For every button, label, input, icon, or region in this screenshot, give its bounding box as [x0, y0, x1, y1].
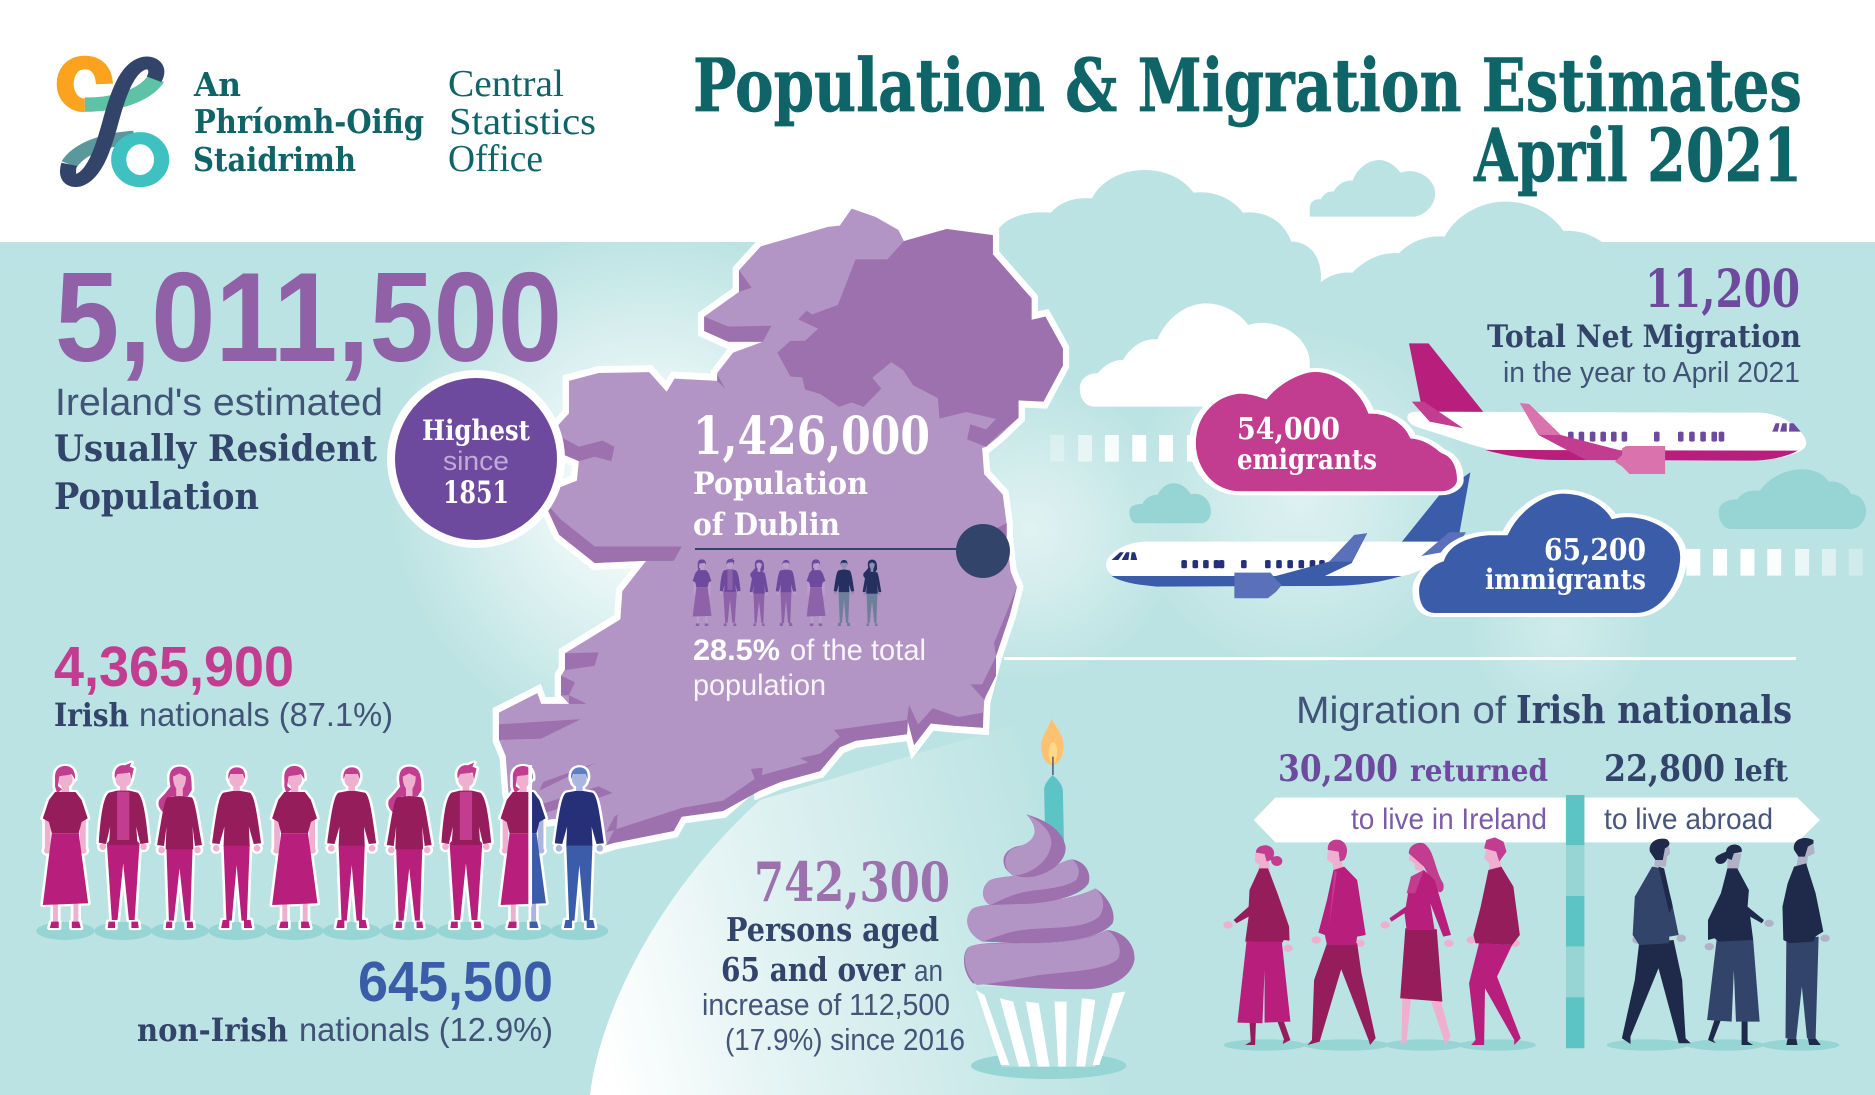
emigrants text — [1237, 412, 1377, 476]
headline number: 5,011,500 — [55, 246, 562, 388]
logo text: Irish name: Staidrimh — [193, 140, 356, 179]
non-Irish nationals stat: nationals (12.9%) — [299, 1011, 553, 1048]
returned figure — [1278, 748, 1548, 790]
over-65s stat: (17.9%) since 2016 — [725, 1022, 965, 1057]
net migration stat: in the year to April 2021 — [1503, 357, 1800, 389]
badge: highest since 1851 — [391, 374, 561, 544]
net migration stat: 11,200 — [1645, 259, 1800, 320]
plane: immigrants — [1106, 472, 1470, 598]
Dublin share text — [693, 634, 926, 702]
over-65s stat: 742,300 — [754, 850, 950, 914]
logo text: Irish name: An — [193, 65, 241, 104]
heading: migration of Irish nationals: Migration of — [1296, 690, 1506, 732]
over-65s stat: increase of 112,500 — [702, 987, 950, 1022]
net migration stat: Total Net Migration — [1487, 319, 1801, 355]
divider — [1004, 657, 1796, 660]
left figure: 22,800 — [1604, 748, 1725, 790]
non-Irish nationals stat — [137, 950, 553, 1049]
immigrants text: immigrants — [1485, 563, 1646, 596]
Dublin share text: 28.5% — [693, 634, 780, 667]
people returning — [1223, 837, 1536, 1051]
logo icon — [65, 62, 162, 181]
background glows — [390, 230, 1650, 750]
immigrants text — [1485, 533, 1646, 596]
immigrants text: 65,200 — [1544, 533, 1646, 568]
signpost labels — [1351, 803, 1773, 836]
cloud: emigrants — [1193, 370, 1460, 493]
logo text: Irish name: Phríomh-Oifig — [194, 102, 424, 141]
Dublin share text: of the total — [790, 634, 926, 667]
signpost labels: to live in Ireland — [1351, 803, 1547, 836]
Dublin text — [693, 406, 930, 543]
signpost with arrows — [1254, 795, 1820, 1048]
headline label: Ireland's estimated — [55, 382, 383, 424]
logo text: English name: Office — [448, 138, 543, 180]
Irish nationals stat: Irish — [54, 696, 129, 734]
badge: highest since 1851: 1851 — [443, 475, 509, 511]
over-65s stat: an — [914, 953, 943, 988]
Dublin people icons — [693, 558, 881, 626]
emigrants text: emigrants — [1237, 443, 1377, 476]
Dublin text: 1,426,000 — [693, 406, 930, 467]
people leaving — [1607, 838, 1839, 1051]
badge: highest since 1851: Highest — [422, 414, 530, 447]
cloud: white and small teal clouds — [1080, 303, 1866, 529]
heading: migration of Irish nationals — [1296, 687, 1792, 732]
net migration stat — [1487, 259, 1801, 389]
non-Irish nationals stat: non-Irish — [137, 1011, 288, 1049]
row of ten people — [36, 763, 608, 940]
headline label: Population — [54, 476, 259, 518]
logo text: English name: Statistics — [449, 101, 596, 143]
plane: emigrants — [1407, 343, 1806, 474]
logo text: Irish name — [193, 65, 424, 179]
heading: migration of Irish nationals: Irish nationals — [1516, 687, 1792, 732]
Irish nationals stat: 4,365,900 — [54, 635, 294, 699]
migration dashes — [1050, 435, 1863, 576]
Dublin share text: population — [693, 669, 826, 702]
returned figure: returned — [1410, 754, 1548, 789]
Dublin text: of Dublin — [693, 507, 840, 543]
title — [693, 43, 1802, 199]
Irish nationals stat: nationals (87.1%) — [139, 696, 393, 733]
map of Ireland — [499, 209, 1063, 846]
over-65s stat: Persons aged — [726, 910, 939, 949]
non-Irish nationals stat: 645,500 — [358, 950, 553, 1014]
logo text: English name — [448, 63, 596, 180]
Dublin text: Population — [693, 466, 868, 502]
over-65s stat: 65 and over — [721, 950, 906, 989]
left figure: left — [1734, 754, 1788, 789]
headline label — [54, 382, 383, 518]
badge: highest since 1851: since — [443, 446, 509, 476]
clouds — [994, 160, 1602, 290]
returned figure: 30,200 — [1278, 748, 1398, 790]
headline label: Usually Resident — [54, 428, 377, 470]
signpost labels: to live abroad — [1604, 803, 1773, 836]
emigrants text: 54,000 — [1237, 412, 1340, 447]
cloud: immigrants — [1416, 492, 1684, 615]
logo text: English name: Central — [448, 63, 564, 105]
cupcake icon — [964, 718, 1135, 1079]
Irish nationals stat — [54, 635, 393, 734]
Dublin marker — [695, 524, 1010, 578]
over-65s stat — [702, 850, 965, 1057]
